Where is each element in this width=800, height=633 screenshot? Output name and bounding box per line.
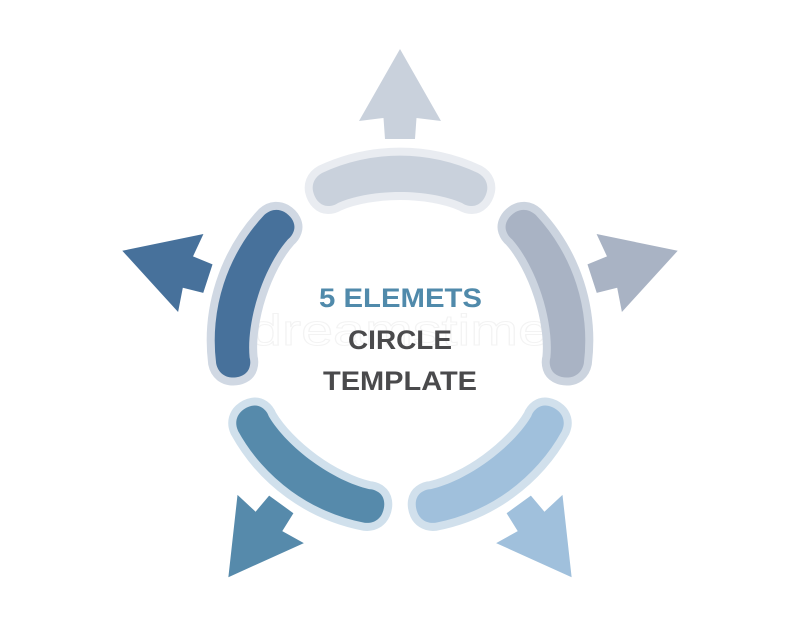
title: TEMPLATE [323,366,477,396]
title: 5 ELEMETS [319,283,482,313]
element 1: top segment and arrow [313,49,487,206]
element 3: lower right segment and arrow [409,399,642,629]
title: CIRCLE [348,325,452,355]
title [319,283,482,396]
element 2: right segment and arrow [501,168,705,382]
element 4: lower left segment and arrow [158,399,391,629]
watermark: dreamstime [250,306,550,355]
element 5: left segment and arrow [95,168,299,382]
